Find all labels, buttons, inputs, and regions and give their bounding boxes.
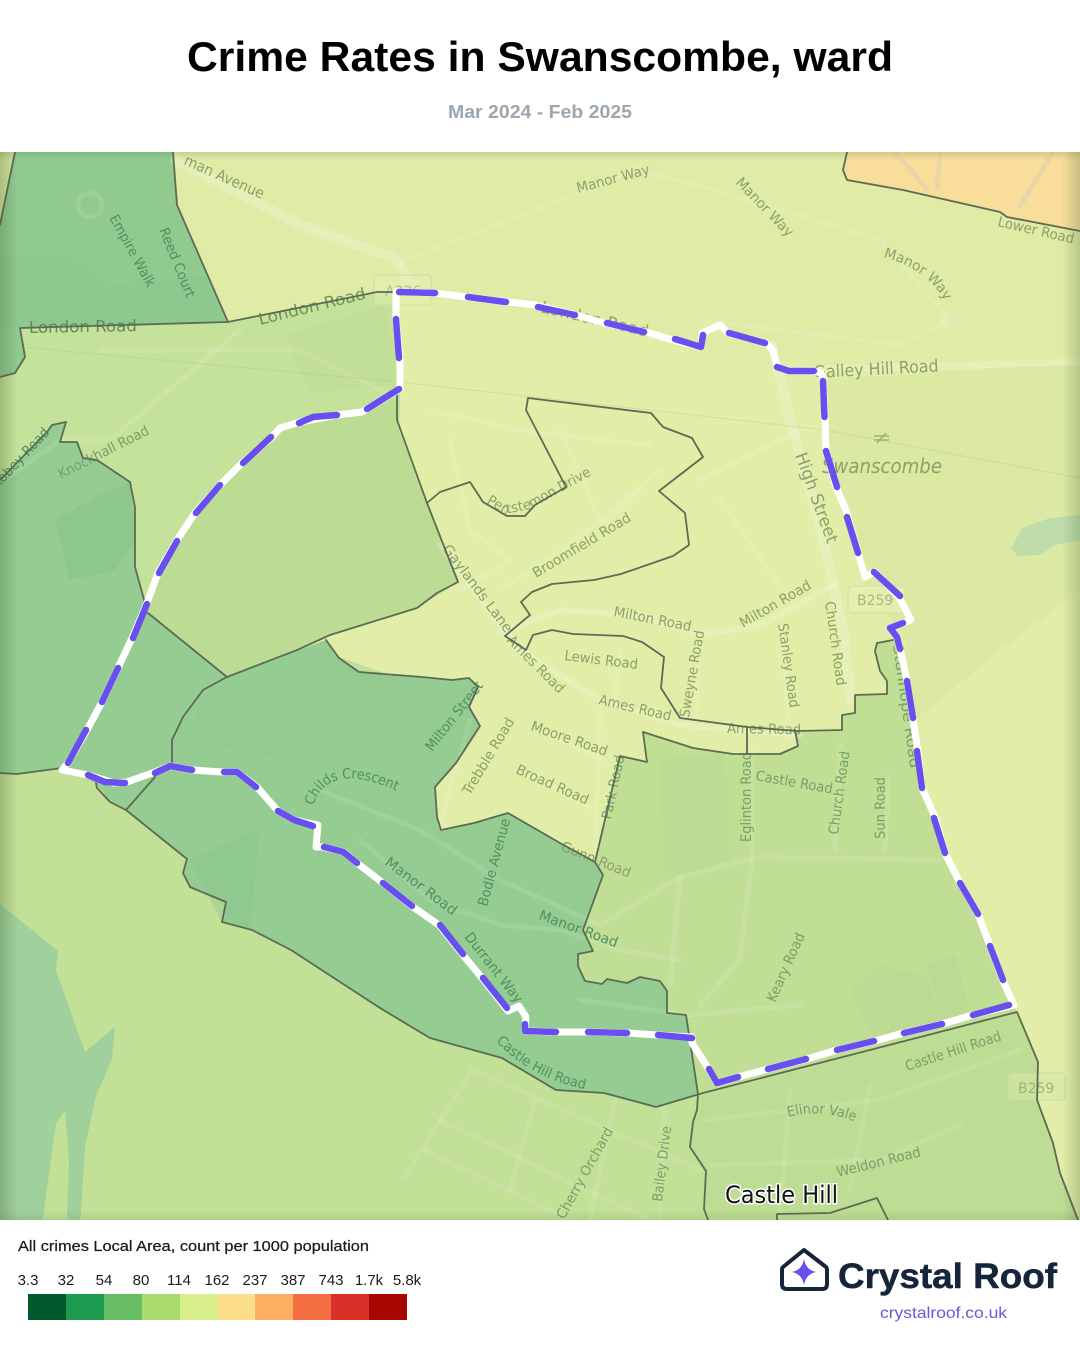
road labels on pale cells: Moore Road bbox=[529, 719, 610, 760]
road labels on light-green cells: London Road bbox=[29, 316, 137, 337]
map texture: runway stripes in the orange cell bbox=[895, 152, 1053, 208]
road labels on pale cells: Swanscombe bbox=[822, 454, 942, 478]
road labels on green cells: Childs Crescent bbox=[305, 768, 399, 804]
road labels on pale cells: Milton Road bbox=[737, 578, 814, 631]
road labels on pale cells: Stanley Road bbox=[774, 622, 802, 709]
road labels on light-green cells: Castle Road bbox=[754, 768, 834, 797]
railway line bbox=[0, 345, 1080, 478]
road labels on light-green cells: Cherry Orchard bbox=[554, 1125, 617, 1222]
road labels on pale cells: Sweyne Road bbox=[677, 629, 708, 719]
map texture: darker land patches bbox=[208, 657, 383, 920]
road labels on light-green cells: London Road bbox=[256, 284, 368, 329]
road labels on green cells bbox=[0, 214, 622, 1089]
map edge vignette bbox=[0, 152, 1080, 1220]
legend scale labels: 114 bbox=[167, 1272, 191, 1289]
road labels on pale cells: Church Road bbox=[821, 600, 849, 687]
road labels on pale cells: Lewis Road bbox=[564, 648, 639, 673]
road labels on light-green cells: Weldon Road bbox=[835, 1145, 922, 1181]
legend bbox=[18, 1238, 422, 1320]
road labels on green cells: Empire Walk bbox=[106, 212, 159, 291]
road labels on pale cells bbox=[160, 157, 1074, 902]
road labels on pale cells: man Avenue bbox=[181, 151, 267, 203]
ward boundary: purple dashes bbox=[68, 292, 1009, 1083]
icon: house with star bbox=[782, 1250, 827, 1289]
legend colour bar bbox=[28, 1294, 407, 1320]
road labels on green cells: Manor Road bbox=[537, 908, 620, 951]
road labels on light-green cells: Church Road bbox=[826, 750, 854, 836]
choropleth area: south-west light-green cell bbox=[0, 768, 708, 1220]
road labels on light-green cells: Eglinton Road bbox=[739, 752, 755, 842]
road labels on pale cells: Lower Road bbox=[996, 214, 1076, 247]
cell boundary lines bbox=[0, 152, 1080, 1220]
road labels on light-green cells: Keary Road bbox=[764, 931, 809, 1005]
map texture: lake on the east bbox=[1011, 515, 1080, 556]
road labels on pale cells: Trebble Road bbox=[459, 715, 518, 799]
road network: main roads bbox=[175, 160, 1080, 735]
road labels on green cells: Bodle Avenue bbox=[475, 817, 514, 908]
title: Crime Rates in Swanscombe, ward bbox=[187, 33, 893, 80]
road sign: A226 bbox=[374, 275, 431, 305]
choropleth area: central-south green cells bbox=[0, 422, 698, 1107]
road labels on pale cells: Manor Way bbox=[575, 162, 651, 197]
legend scale labels: 387 bbox=[280, 1272, 306, 1289]
ward boundary: white casing bbox=[62, 292, 1014, 1083]
road labels on pale cells: Broad Road bbox=[513, 762, 591, 808]
road labels on green cells: Durrant Way bbox=[461, 930, 526, 1006]
legend scale labels: 1.7k bbox=[355, 1272, 384, 1289]
legend scale labels bbox=[18, 1272, 422, 1289]
road labels on light-green cells: Knockhall Road bbox=[56, 423, 152, 483]
road labels on green cells: Milton Street bbox=[423, 678, 487, 754]
road labels on light-green cells: Stanhope Road bbox=[889, 643, 922, 769]
road labels on pale cells: Manor Way bbox=[884, 248, 951, 298]
road labels on pale cells: Gaylands Lane bbox=[439, 542, 515, 636]
legend scale labels: 3.3 bbox=[18, 1272, 38, 1289]
choropleth area: west light-green cell bbox=[0, 293, 396, 612]
road labels on pale cells: Manor Way bbox=[732, 175, 796, 240]
road labels on pale cells: Ames Road bbox=[727, 721, 801, 738]
subtitle: date range: Mar 2024 - Feb 2025 bbox=[448, 102, 632, 122]
legend scale labels: 162 bbox=[204, 1272, 230, 1289]
road labels on light-green cells: Sun Road bbox=[873, 777, 889, 839]
road labels on pale cells: London Road bbox=[539, 297, 651, 341]
road labels on pale cells: Ames Road bbox=[597, 692, 673, 725]
road network: minor roads bbox=[5, 165, 1020, 1225]
road sign: B259 north: B259 bbox=[857, 593, 893, 609]
choropleth area: south-east ward green cell bbox=[578, 640, 1017, 1094]
road labels on light-green cells: Bailey Drive bbox=[650, 1125, 675, 1202]
road labels on light-green cells: Elinor Vale bbox=[787, 1104, 856, 1121]
road sign: B259 south: B259 bbox=[1018, 1081, 1054, 1097]
road labels on light-green cells: Park Road bbox=[599, 754, 628, 821]
road labels on pale cells: Broomfield Road bbox=[530, 510, 634, 581]
map panel bbox=[0, 152, 1080, 1220]
choropleth area: Castle Hill cell bbox=[690, 1012, 1078, 1220]
road labels on light-green cells: Castle Hill Road bbox=[903, 1029, 1003, 1075]
website link: crystalroof.co.uk bbox=[880, 1305, 1008, 1322]
legend scale labels: 743 bbox=[318, 1272, 344, 1289]
legend scale labels: 54 bbox=[96, 1272, 112, 1289]
legend scale labels: 5.8k bbox=[393, 1272, 422, 1289]
map texture: water patch on the west bbox=[0, 904, 115, 1225]
legend scale labels: 32 bbox=[58, 1272, 74, 1289]
logo wordmark: Crystal Roof bbox=[838, 1257, 1057, 1296]
choropleth area: north-east orange cell bbox=[843, 152, 1080, 231]
road labels on pale cells: Ames Road bbox=[503, 633, 568, 697]
icon: railway station symbol bbox=[874, 433, 889, 443]
logo: Crystal Roof bbox=[782, 1250, 1057, 1322]
road labels on green cells: Reed Court bbox=[155, 226, 198, 301]
road labels on light-green cells bbox=[0, 287, 1004, 1218]
road labels on green cells: Manor Road bbox=[382, 854, 460, 919]
legend scale labels: 237 bbox=[242, 1272, 268, 1289]
choropleth area: north-west green cell bbox=[0, 152, 228, 377]
place label: Castle Hill: Castle Hill bbox=[725, 1181, 838, 1209]
legend title: All crimes Local Area, count per 1000 population bbox=[18, 1238, 369, 1255]
road labels on green cells: Castle Hill Road bbox=[498, 1036, 586, 1089]
legend scale labels: 80 bbox=[133, 1272, 149, 1289]
road labels on pale cells: Gunn Road bbox=[559, 839, 633, 881]
road sign: B259 north bbox=[848, 586, 905, 613]
choropleth area: ward west part bbox=[147, 389, 458, 677]
road sign: A226: A226 bbox=[385, 284, 421, 300]
road labels on pale cells: Galley Hill Road bbox=[813, 356, 939, 383]
road sign: B259 south bbox=[1008, 1073, 1065, 1100]
road labels on pale cells: High Street bbox=[790, 450, 842, 546]
road labels on pale cells: Pentstemon Drive bbox=[487, 470, 591, 514]
road labels on pale cells: Milton Road bbox=[612, 604, 693, 635]
